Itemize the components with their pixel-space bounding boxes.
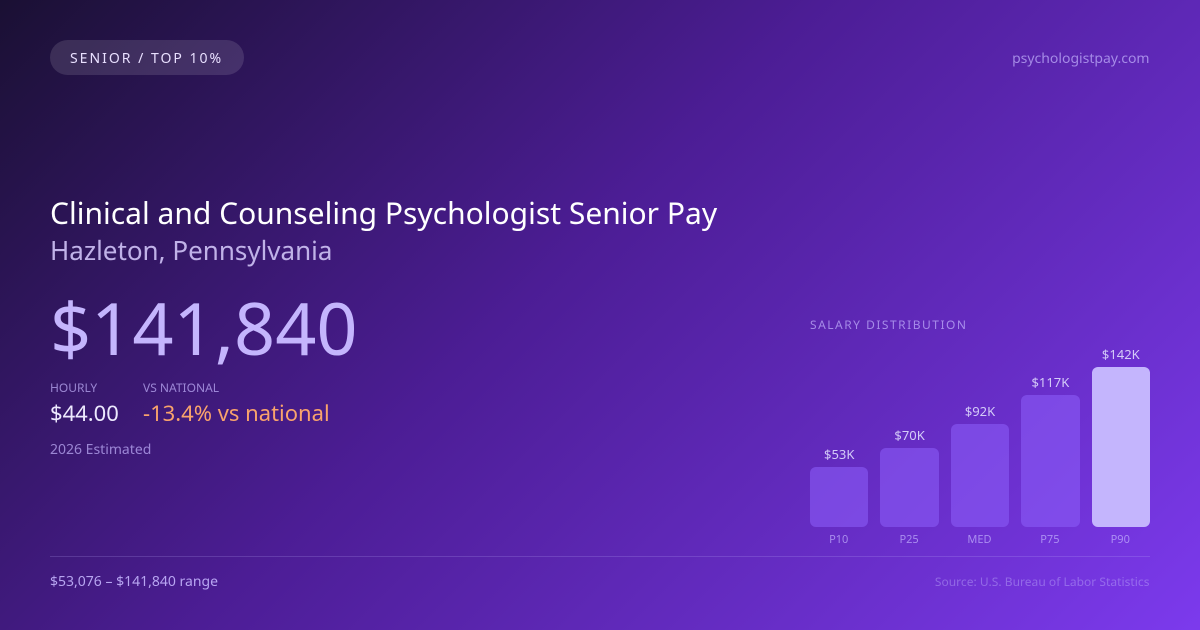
stat: hourly — [50, 379, 119, 428]
value MED: $92K — [965, 402, 995, 420]
badge: senior / top 10% — [50, 40, 244, 75]
site domain: psychologistpay.com — [1012, 49, 1150, 68]
chart: salary distribution — [810, 316, 1150, 547]
bar P10 — [810, 467, 868, 527]
axis label MED: MED — [967, 532, 992, 547]
vs national label: VS NATIONAL — [143, 379, 219, 396]
bar P90 — [1092, 367, 1150, 527]
location subtitle: Hazleton, Pennsylvania — [50, 232, 332, 268]
bar P75 — [1021, 395, 1080, 527]
source note: Source: U.S. Bureau of Labor Statistics — [935, 573, 1150, 590]
axis label P10: P10 — [829, 532, 848, 547]
value P90: $142K — [1102, 345, 1140, 363]
hourly value: $44.00 — [50, 398, 119, 428]
axis label P75: P75 — [1040, 532, 1060, 547]
salary range: $53,076 – $141,840 range — [50, 572, 218, 591]
value P25: $70K — [894, 426, 925, 444]
hourly label: HOURLY — [50, 379, 97, 396]
badge: senior / top 10%: SENIOR / TOP 10% — [70, 49, 223, 68]
bar MED — [951, 424, 1009, 527]
stat: vs national — [143, 379, 330, 428]
bar P25 — [880, 448, 939, 527]
estimate year note: 2026 Estimated — [50, 440, 151, 459]
main salary figure: $141,840 — [50, 279, 358, 377]
value P10: $53K — [824, 445, 854, 463]
axis label P90: P90 — [1111, 532, 1130, 547]
chart heading: SALARY DISTRIBUTION — [810, 316, 968, 333]
vs national value: -13.4% vs national — [143, 398, 330, 428]
title: Clinical and Counseling Psychologist Senior Pay — [50, 192, 717, 233]
value P75: $117K — [1031, 373, 1069, 391]
axis label P25: P25 — [899, 532, 919, 547]
